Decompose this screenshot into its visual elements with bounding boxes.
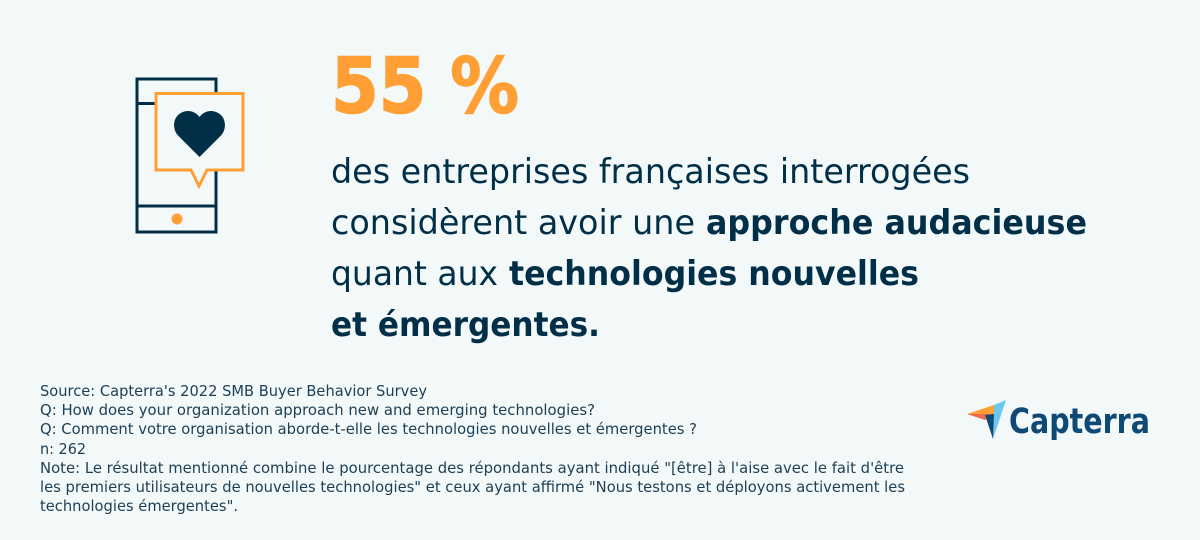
statement text: technologies nouvelles [509, 254, 919, 294]
statement text [331, 152, 1087, 345]
icon: heart [174, 111, 225, 157]
statement text: quant aux [331, 254, 498, 294]
icon: speech bubble [156, 94, 243, 186]
statement text: considèrent avoir une [331, 203, 695, 243]
headline percentage: 55 % [331, 42, 519, 132]
icon: phone with heart speech bubble [137, 79, 243, 232]
icon: phone outline [137, 79, 216, 232]
statement text: des entreprises françaises interrogées [331, 152, 970, 192]
logo mark [967, 400, 1006, 439]
source and notes: technologies émergentes". [40, 497, 238, 515]
statement text: approche audacieuse [706, 203, 1087, 243]
icon: phone button [172, 214, 182, 224]
source and notes: n: 262 [40, 440, 86, 458]
statement text: et émergentes. [331, 305, 600, 345]
logo: Capterra [967, 400, 1150, 442]
source and notes: Note: Le résultat mentionné combine le pourcentage des répondants ayant indiqué "[être] à l'aise avec le fait d'être [40, 459, 904, 477]
source and notes: Q: Comment votre organisation aborde-t-elle les technologies nouvelles et émergentes ? [40, 420, 697, 438]
source and notes: les premiers utilisateurs de nouvelles technologies" et ceux ayant affirmé "Nous testons et déployons activement les [40, 478, 905, 496]
logo wordmark: Capterra [1009, 402, 1150, 442]
source and notes [40, 382, 905, 515]
source and notes: Source: Capterra's 2022 SMB Buyer Behavior Survey [40, 382, 427, 400]
source and notes: Q: How does your organization approach new and emerging technologies? [40, 401, 595, 419]
